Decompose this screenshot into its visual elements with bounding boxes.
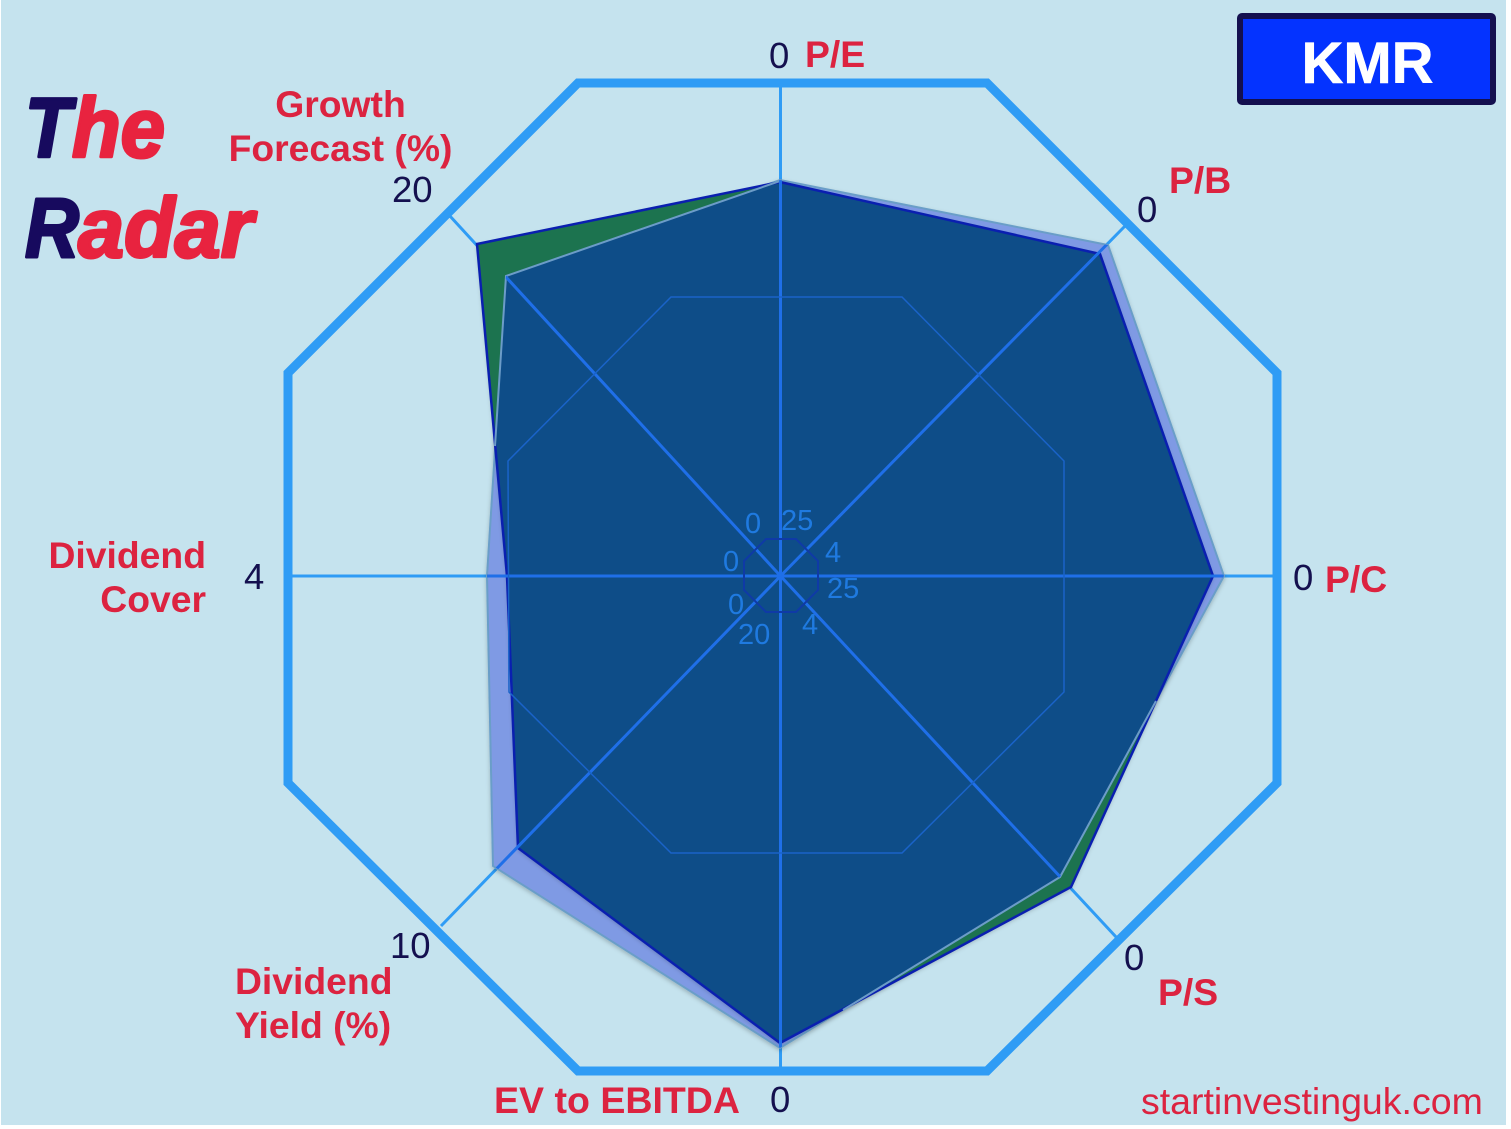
- outer octagon frame: [288, 83, 1277, 1071]
- label: P/C: 0: [1293, 557, 1313, 598]
- label: Dividend Yield: Yield (%): [235, 1004, 391, 1046]
- label: Dividend Cover: Dividend: [48, 534, 206, 576]
- label: Dividend Cover: [48, 534, 264, 620]
- middle grid octagon: [508, 297, 1064, 853]
- label: Dividend Cover: 4: [244, 556, 264, 597]
- inner grid octagon: [744, 539, 818, 612]
- label: P/E: [769, 33, 865, 76]
- label: P/E: 0: [769, 35, 789, 76]
- label: P/B: P/B: [1169, 159, 1231, 201]
- label: P/B: [1137, 159, 1231, 230]
- ticker badge: KMR: [1301, 31, 1434, 96]
- inner scale labels: 0: [745, 508, 761, 540]
- label: P/S: P/S: [1158, 971, 1218, 1013]
- title: adar: [78, 181, 257, 275]
- title: T: [25, 81, 77, 175]
- inner scale labels: 4: [825, 537, 841, 569]
- label: Dividend Yield: Dividend: [235, 960, 392, 1002]
- label: P/C: P/C: [1325, 558, 1387, 600]
- axes over data: [487, 180, 1224, 1048]
- ticker badge: [1240, 16, 1493, 102]
- label: Growth Forecast: Forecast (%): [229, 127, 452, 169]
- label: Growth Forecast: Growth: [275, 83, 406, 125]
- area: overlap: [477, 182, 1213, 1043]
- label: EV to EBITDA: EV to EBITDA: [494, 1079, 740, 1121]
- label: P/C: [1293, 557, 1387, 600]
- website credit: startinvestinguk.com: [1141, 1080, 1483, 1122]
- inner scale labels: 0: [723, 546, 739, 578]
- outline: green series: [477, 182, 1213, 1043]
- title: [25, 81, 257, 275]
- label: EV to EBITDA: 0: [770, 1079, 790, 1120]
- label: P/S: [1124, 937, 1218, 1013]
- outline: light series: [495, 181, 780, 446]
- label: Dividend Yield: [235, 925, 431, 1046]
- inner scale labels: 25: [781, 505, 813, 537]
- label: Dividend Cover: Cover: [100, 578, 206, 620]
- inner scale labels: 4: [802, 609, 818, 641]
- title: R: [25, 181, 79, 275]
- outline: light series lower right: [843, 701, 1156, 1010]
- inner scale labels: [723, 505, 859, 651]
- area: green series: [477, 182, 1213, 1043]
- axis lines: [288, 83, 1277, 1071]
- label: P/S: 0: [1124, 937, 1144, 978]
- label: P/B: 0: [1137, 189, 1157, 230]
- inner scale labels: 20: [738, 619, 770, 651]
- label: Dividend Yield: 10: [390, 925, 431, 966]
- title: he: [72, 81, 165, 175]
- inner scale labels: 25: [827, 573, 859, 605]
- label: Growth Forecast: 20: [392, 169, 433, 210]
- label: Growth Forecast: [229, 83, 452, 210]
- label: P/E: P/E: [805, 33, 865, 75]
- inner scale labels: 0: [728, 589, 744, 621]
- radar data areas: [477, 180, 1224, 1048]
- area: light series: [487, 180, 1224, 1048]
